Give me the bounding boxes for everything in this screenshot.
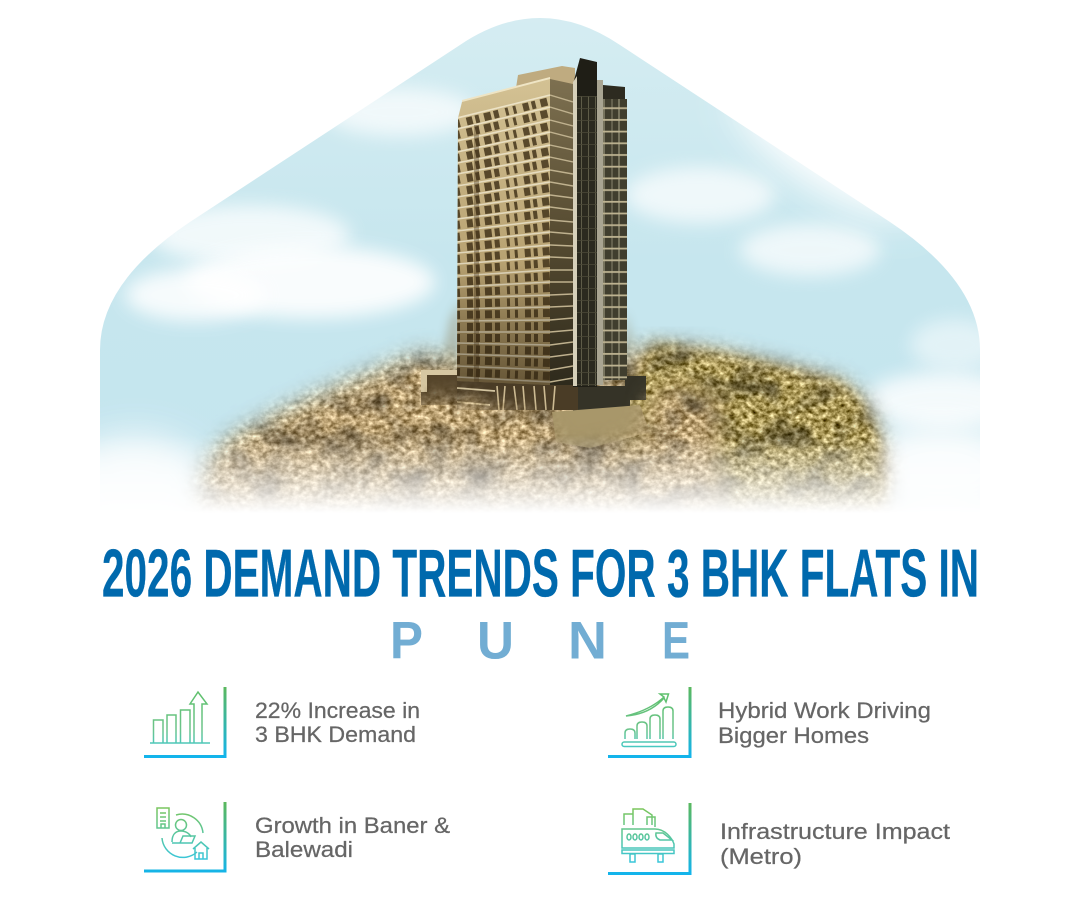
subtitle: Pune: U: [477, 612, 514, 670]
icon: rising bar chart with arrow: [144, 687, 225, 756]
tower main facade: [457, 79, 550, 385]
subtitle: Pune: N: [568, 612, 607, 670]
icon: person with laptop, office and home: [144, 802, 225, 871]
wooded hill, foreground: [400, 385, 720, 525]
label: Hybrid Work Driving: [718, 698, 931, 723]
feature: Baner and Balewadi: Balewadi: [255, 837, 353, 862]
clouds: [100, 20, 980, 500]
label: Infrastructure Impact: [720, 819, 950, 844]
feature: infrastructure impact: [608, 803, 950, 874]
feature: 22% increase: 3 BHK Demand: [255, 722, 416, 747]
feature: hybrid work: [608, 687, 931, 756]
subtitle: Pune: P: [390, 612, 423, 670]
tower central shaft: [573, 58, 597, 387]
lawn: [552, 405, 650, 448]
label: Growth in Baner &: [255, 813, 450, 838]
icon: metro train and buildings: [608, 803, 690, 874]
tower roof: [516, 66, 575, 88]
sky: [100, 18, 980, 481]
subtitle: Pune: [390, 612, 690, 670]
tower right wing: [603, 85, 625, 99]
wooded hill, back: [201, 345, 885, 530]
feature: Baner and Balewadi: [144, 802, 450, 871]
tower side face: [550, 79, 573, 385]
feature: 22% increase: [144, 687, 420, 756]
feature: infrastructure impact: (Metro): [720, 844, 802, 869]
icon: growing bars with curved arrow: [608, 687, 690, 756]
tower podium: [421, 375, 460, 405]
feature: hybrid work: Bigger Homes: [718, 723, 869, 748]
label: 22% Increase in: [255, 698, 420, 723]
hero image: tower on wooded hill in sky: [100, 18, 980, 510]
subtitle: Pune: E: [662, 612, 690, 670]
tower: [421, 58, 650, 448]
haze behind tower: [439, 303, 638, 370]
tower base columns: [457, 381, 578, 410]
